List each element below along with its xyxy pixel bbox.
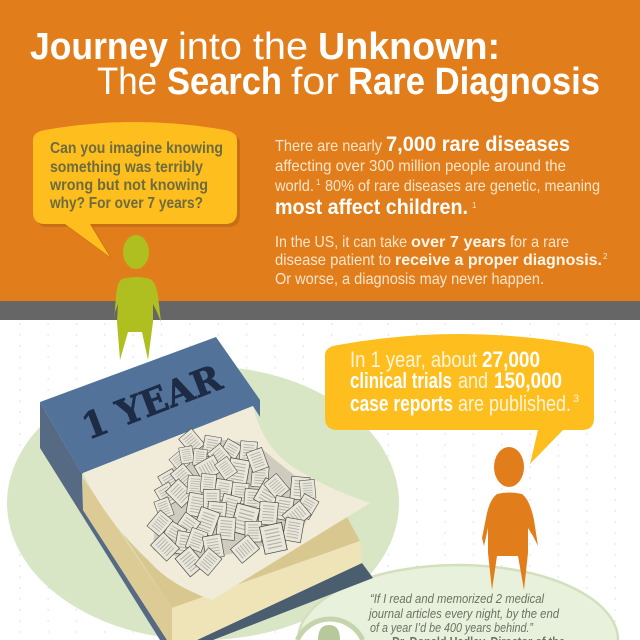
speech bubble: publications: are published.	[458, 391, 571, 416]
text block: rare disease facts	[274, 133, 600, 219]
icon: orange person	[482, 447, 538, 590]
text block: time to diagnosis: receive a proper diagnosis.	[395, 252, 602, 269]
speech bubble: question: something was terribly	[50, 159, 203, 176]
calendar curled page	[83, 406, 370, 600]
title: Rare Diagnosis	[348, 61, 600, 103]
calendar blue top	[40, 337, 260, 474]
text block: time to diagnosis: over 7 years	[411, 234, 506, 251]
text block: time to diagnosis: for a rare	[510, 234, 569, 251]
text block: rare disease facts: 7,000 rare diseases	[386, 133, 570, 156]
title: Journey	[30, 26, 168, 68]
quote text: journal articles every night, by the end	[367, 606, 560, 621]
quote text	[367, 591, 565, 640]
text block: rare disease facts: There are nearly	[275, 138, 382, 155]
orange header panel	[0, 0, 640, 301]
text block: rare disease facts: 1	[472, 201, 477, 210]
background: white lower section	[0, 320, 640, 640]
title: into the	[178, 26, 308, 68]
title	[30, 26, 600, 103]
calendar page stack front	[172, 541, 362, 640]
paper pile	[147, 428, 319, 577]
title: The	[97, 61, 157, 103]
speech bubble: publications: In 1 year, about	[350, 347, 477, 372]
title: for	[291, 61, 339, 103]
gray ground band	[0, 301, 640, 320]
speech bubble: publications: case reports	[350, 391, 453, 416]
speech bubble: publications: and	[458, 368, 488, 393]
icon: doctor portrait circle	[297, 619, 363, 640]
quote text: of a year I’d be 400 years behind.”	[370, 620, 534, 635]
text block: rare disease facts: 1	[316, 178, 321, 187]
speech bubble: question: Can you imagine knowing	[50, 140, 223, 157]
icon: calendar with paper pile	[40, 337, 373, 640]
speech bubble: publications: 150,000	[494, 368, 562, 393]
calendar page stack side	[83, 478, 172, 640]
quote text: “If I read and memorized 2 medical	[370, 591, 545, 606]
text block: rare disease facts: most affect children.	[275, 196, 468, 219]
calendar dark side	[40, 402, 167, 640]
speech bubble: publications: clinical trials	[350, 368, 452, 393]
calendar bottom binding	[197, 563, 373, 640]
icon: green person	[114, 235, 161, 360]
title: Search	[167, 61, 282, 103]
speech bubble: publications	[325, 334, 594, 464]
text block: time to diagnosis: disease patient to	[275, 252, 391, 269]
text block: rare disease facts: 80% of rare diseases are genetic, meaning	[325, 178, 600, 195]
speech bubble: question: why? For over 7 years?	[49, 195, 203, 212]
title: Unknown:	[318, 26, 500, 68]
text block: time to diagnosis	[275, 234, 608, 288]
speech bubble: publications: 27,000	[482, 347, 540, 372]
green background circle	[7, 366, 399, 640]
speech bubble: question	[33, 122, 240, 259]
text block: rare disease facts: affecting over 300 million people around the	[275, 158, 566, 175]
text block: time to diagnosis: 2	[603, 252, 608, 261]
speech bubble: publications: 3	[573, 393, 579, 405]
text block: rare disease facts: world.	[274, 178, 314, 195]
text block: time to diagnosis: In the US, it can take	[275, 234, 407, 251]
calendar page stack top	[120, 517, 360, 608]
calendar label: 1 YEAR	[76, 356, 229, 448]
speech bubble: question: wrong but not knowing	[49, 177, 208, 194]
quote bubble background	[298, 565, 618, 640]
text block: time to diagnosis: Or worse, a diagnosis may never happen.	[275, 271, 544, 288]
